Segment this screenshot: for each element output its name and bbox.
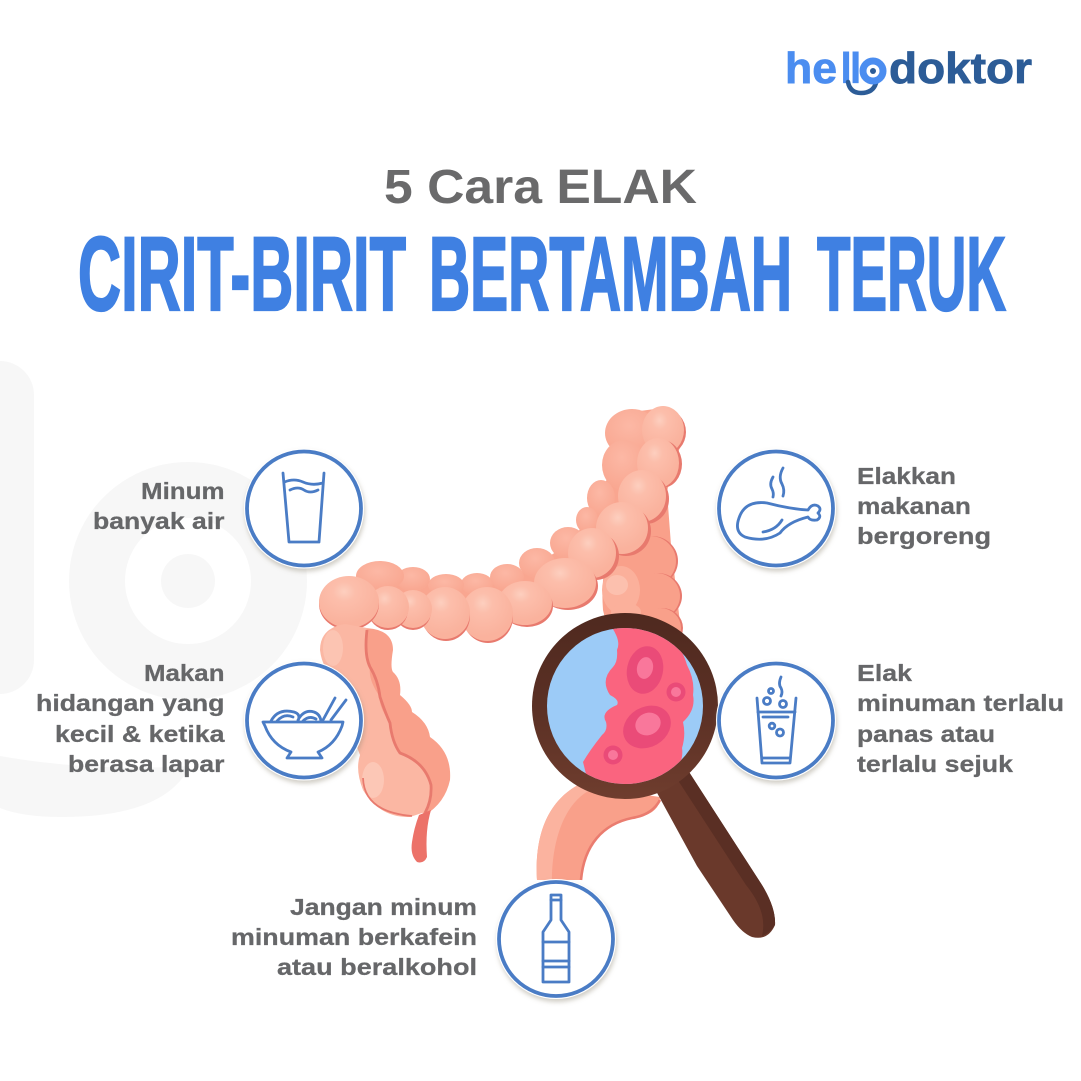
illustration: magnifying glass — [532, 613, 775, 938]
title: CIRIT-BIRIT BERTAMBAH TERUK: BERTAMBAH — [429, 216, 792, 333]
icon: bowl of noodles — [244, 660, 364, 780]
icon: glass of water — [244, 448, 364, 568]
text: elak minuman panas sejuk: terlalu sejuk — [857, 751, 1013, 777]
text: jangan minum berkafein: minuman berkafein — [231, 924, 477, 950]
text: makan hidangan kecil: kecil & ketika — [55, 721, 225, 747]
icon: hot drink glass — [716, 660, 836, 780]
logo: hellodoktor: ll — [840, 44, 862, 93]
rectum tube — [537, 785, 660, 880]
background watermark logo — [0, 361, 307, 817]
title: CIRIT-BIRIT BERTAMBAH TERUK — [78, 216, 1006, 333]
text: makan hidangan kecil: hidangan yang — [36, 690, 224, 716]
lens view — [547, 628, 703, 784]
text: elakkan makanan bergoreng — [857, 463, 991, 549]
descending colon — [320, 624, 450, 817]
ascending colon, behind — [602, 505, 683, 648]
text: elakkan makanan bergoreng: Elakkan — [857, 463, 956, 489]
text: jangan minum berkafein: atau beralkohol — [277, 954, 477, 980]
icon: fried chicken drumstick — [716, 448, 836, 568]
text: jangan minum berkafein: Jangan minum — [290, 894, 477, 920]
lens rim — [532, 613, 718, 799]
text: elakkan makanan bergoreng: bergoreng — [857, 523, 991, 549]
text: makan hidangan kecil: Makan — [144, 660, 224, 686]
logo: hellodoktor: he — [785, 44, 837, 93]
text: elak minuman panas sejuk: panas atau — [857, 721, 995, 747]
text: elakkan makanan bergoreng: makanan — [857, 493, 971, 519]
text: minum banyak air — [93, 478, 225, 534]
transverse colon, back silhouette — [335, 409, 682, 625]
text: minum banyak air: banyak air — [93, 508, 225, 534]
illustration: colon — [319, 406, 686, 880]
transverse colon, front bulbs — [319, 406, 686, 643]
icon: bottle — [496, 879, 616, 999]
text: elak minuman panas sejuk: minuman terlalu — [857, 690, 1064, 716]
text: elak minuman panas sejuk — [857, 660, 1064, 777]
handle — [650, 758, 775, 938]
heading: 5 Cara ELAK: 5 Cara ELAK — [384, 161, 697, 214]
drip — [412, 810, 431, 862]
text: makan hidangan kecil: berasa lapar — [68, 751, 225, 777]
logo: hellodoktor — [785, 44, 1032, 93]
text: jangan minum berkafein — [231, 894, 477, 980]
text: makan hidangan kecil — [36, 660, 225, 777]
text: minum banyak air: Minum — [141, 478, 224, 504]
text: elak minuman panas sejuk: Elak — [857, 660, 912, 686]
title: CIRIT-BIRIT BERTAMBAH TERUK: CIRIT-BIRIT — [78, 216, 406, 333]
logo: hellodoktor: doktor — [889, 44, 1032, 93]
